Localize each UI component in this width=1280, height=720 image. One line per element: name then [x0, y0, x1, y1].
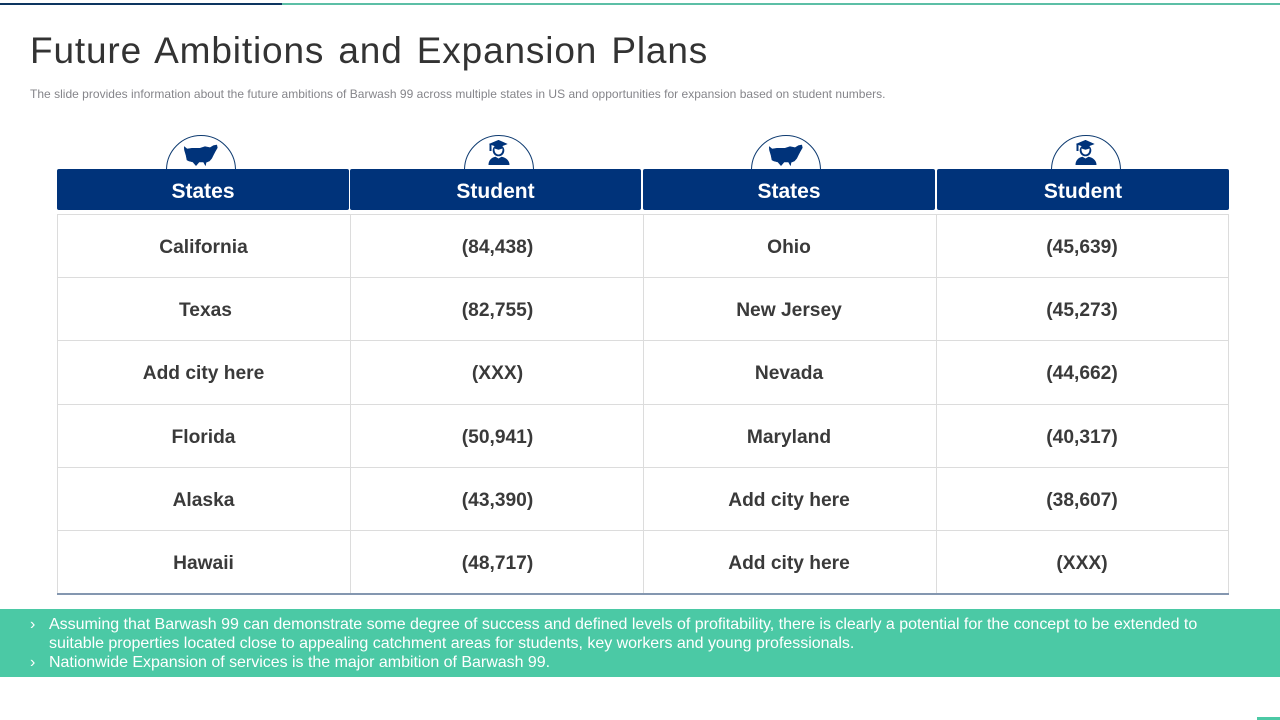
icon: graduate, student column 2 — [464, 135, 534, 169]
row 1: (84,438) — [462, 237, 533, 258]
column header: States: States — [757, 180, 821, 203]
row 3: Nevada — [755, 363, 823, 384]
row 3: (XXX) — [472, 363, 523, 384]
row 2: (82,755) — [462, 300, 533, 321]
column header: States — [57, 169, 349, 210]
row 6 — [173, 553, 1108, 574]
corner accent — [1257, 717, 1280, 720]
row 5: Add city here — [728, 490, 850, 511]
row 1: Ohio — [767, 237, 811, 258]
row 6: (XXX) — [1056, 553, 1108, 574]
column header: Student: Student — [1044, 180, 1122, 203]
top accent bar — [0, 3, 1280, 5]
row 2 — [179, 300, 1118, 321]
column header: Student: Student — [456, 180, 535, 203]
row 1: California — [159, 237, 248, 258]
row 6: Add city here — [728, 553, 850, 574]
bullet text 2: Nationwide Expansion of services is the major ambition of Barwash 99. — [49, 654, 550, 671]
column header: States — [643, 169, 935, 210]
row 5 — [173, 490, 1118, 511]
row 2: (45,273) — [1046, 300, 1118, 321]
row 5: (43,390) — [462, 490, 533, 511]
bullet text 1 — [49, 616, 1197, 652]
row 2: New Jersey — [736, 300, 842, 321]
bullet text 1: suitable properties located close to appealing catchment areas for students, key workers and young professionals. — [49, 635, 854, 652]
bullet marker 1: › — [30, 616, 35, 633]
icon: US map, states column 3 — [751, 135, 821, 169]
subtitle: The slide provides information about the future ambitions of Barwash 99 across multiple states in US and opportunities for expansion based on student numbers. — [30, 87, 886, 101]
row 1: (45,639) — [1046, 237, 1118, 258]
column header: Student — [937, 169, 1229, 210]
row 4: Florida — [172, 427, 235, 448]
row 4: (50,941) — [462, 427, 533, 448]
row 6: Hawaii — [173, 553, 234, 574]
row 5: Alaska — [173, 490, 234, 511]
icon: graduate, student column 4 — [1051, 135, 1121, 169]
row 4: Maryland — [747, 427, 831, 448]
row 5: (38,607) — [1046, 490, 1118, 511]
row 1 — [159, 237, 1118, 258]
column header: States: States — [171, 180, 235, 203]
row 3: (44,662) — [1046, 363, 1118, 384]
row 3: Add city here — [143, 363, 264, 384]
bullet text 1: Assuming that Barwash 99 can demonstrate some degree of success and defined levels of profitability, there is clearly a potential for the concept to be extended to — [49, 616, 1197, 633]
top accent bar dark segment — [0, 3, 282, 5]
column header: Student — [350, 169, 641, 210]
row 3 — [143, 363, 1118, 384]
row 2: Texas — [179, 300, 232, 321]
bullet marker 2: › — [30, 654, 35, 671]
row 4 — [172, 427, 1118, 448]
row 6: (48,717) — [462, 553, 533, 574]
title: Future Ambitions and Expansion Plans — [30, 30, 708, 71]
row 4: (40,317) — [1046, 427, 1118, 448]
callout band — [0, 609, 1280, 677]
icon: US map, states column 1 — [166, 135, 236, 169]
